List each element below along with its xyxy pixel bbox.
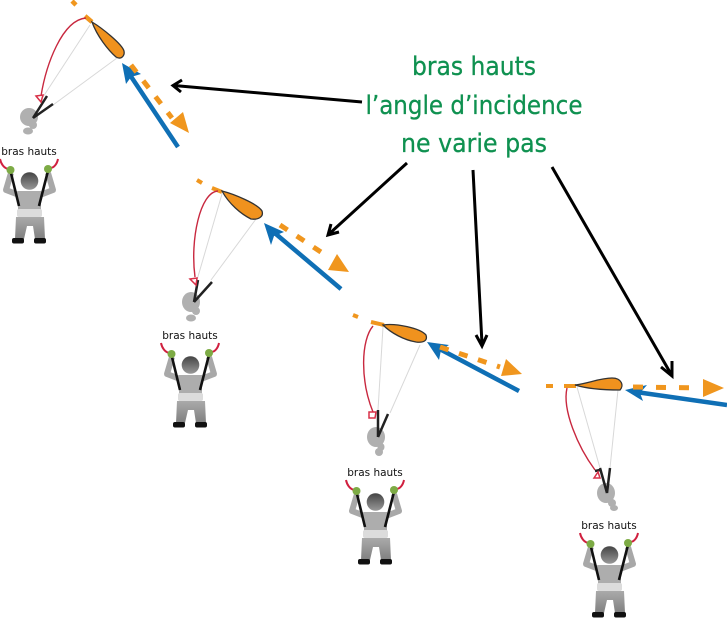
pilot 1: bras hauts bbox=[1, 146, 57, 158]
pilot 4: bras hauts bbox=[581, 520, 637, 532]
glider 2 bbox=[182, 180, 262, 322]
title text bbox=[366, 52, 582, 159]
pilot 3 bbox=[346, 467, 404, 564]
glider 1 bbox=[20, 1, 124, 134]
glider 4 bbox=[546, 378, 622, 511]
pilot 2: bras hauts bbox=[162, 330, 218, 342]
wind arrows 4 bbox=[625, 379, 727, 405]
wind arrows 3 bbox=[427, 342, 522, 391]
wind arrows 2 bbox=[264, 223, 349, 289]
title text: ne varie pas bbox=[401, 129, 547, 159]
title text: l’angle d’incidence bbox=[366, 91, 582, 121]
title text: bras hauts bbox=[412, 52, 536, 82]
pilot 4 bbox=[580, 520, 638, 618]
black arrows bbox=[173, 80, 672, 376]
glider 3 bbox=[353, 315, 426, 456]
wind arrows 1 bbox=[122, 63, 189, 147]
pilot 2 bbox=[161, 330, 219, 428]
pilot 3: bras hauts bbox=[347, 467, 403, 479]
pilot 1 bbox=[0, 146, 58, 244]
